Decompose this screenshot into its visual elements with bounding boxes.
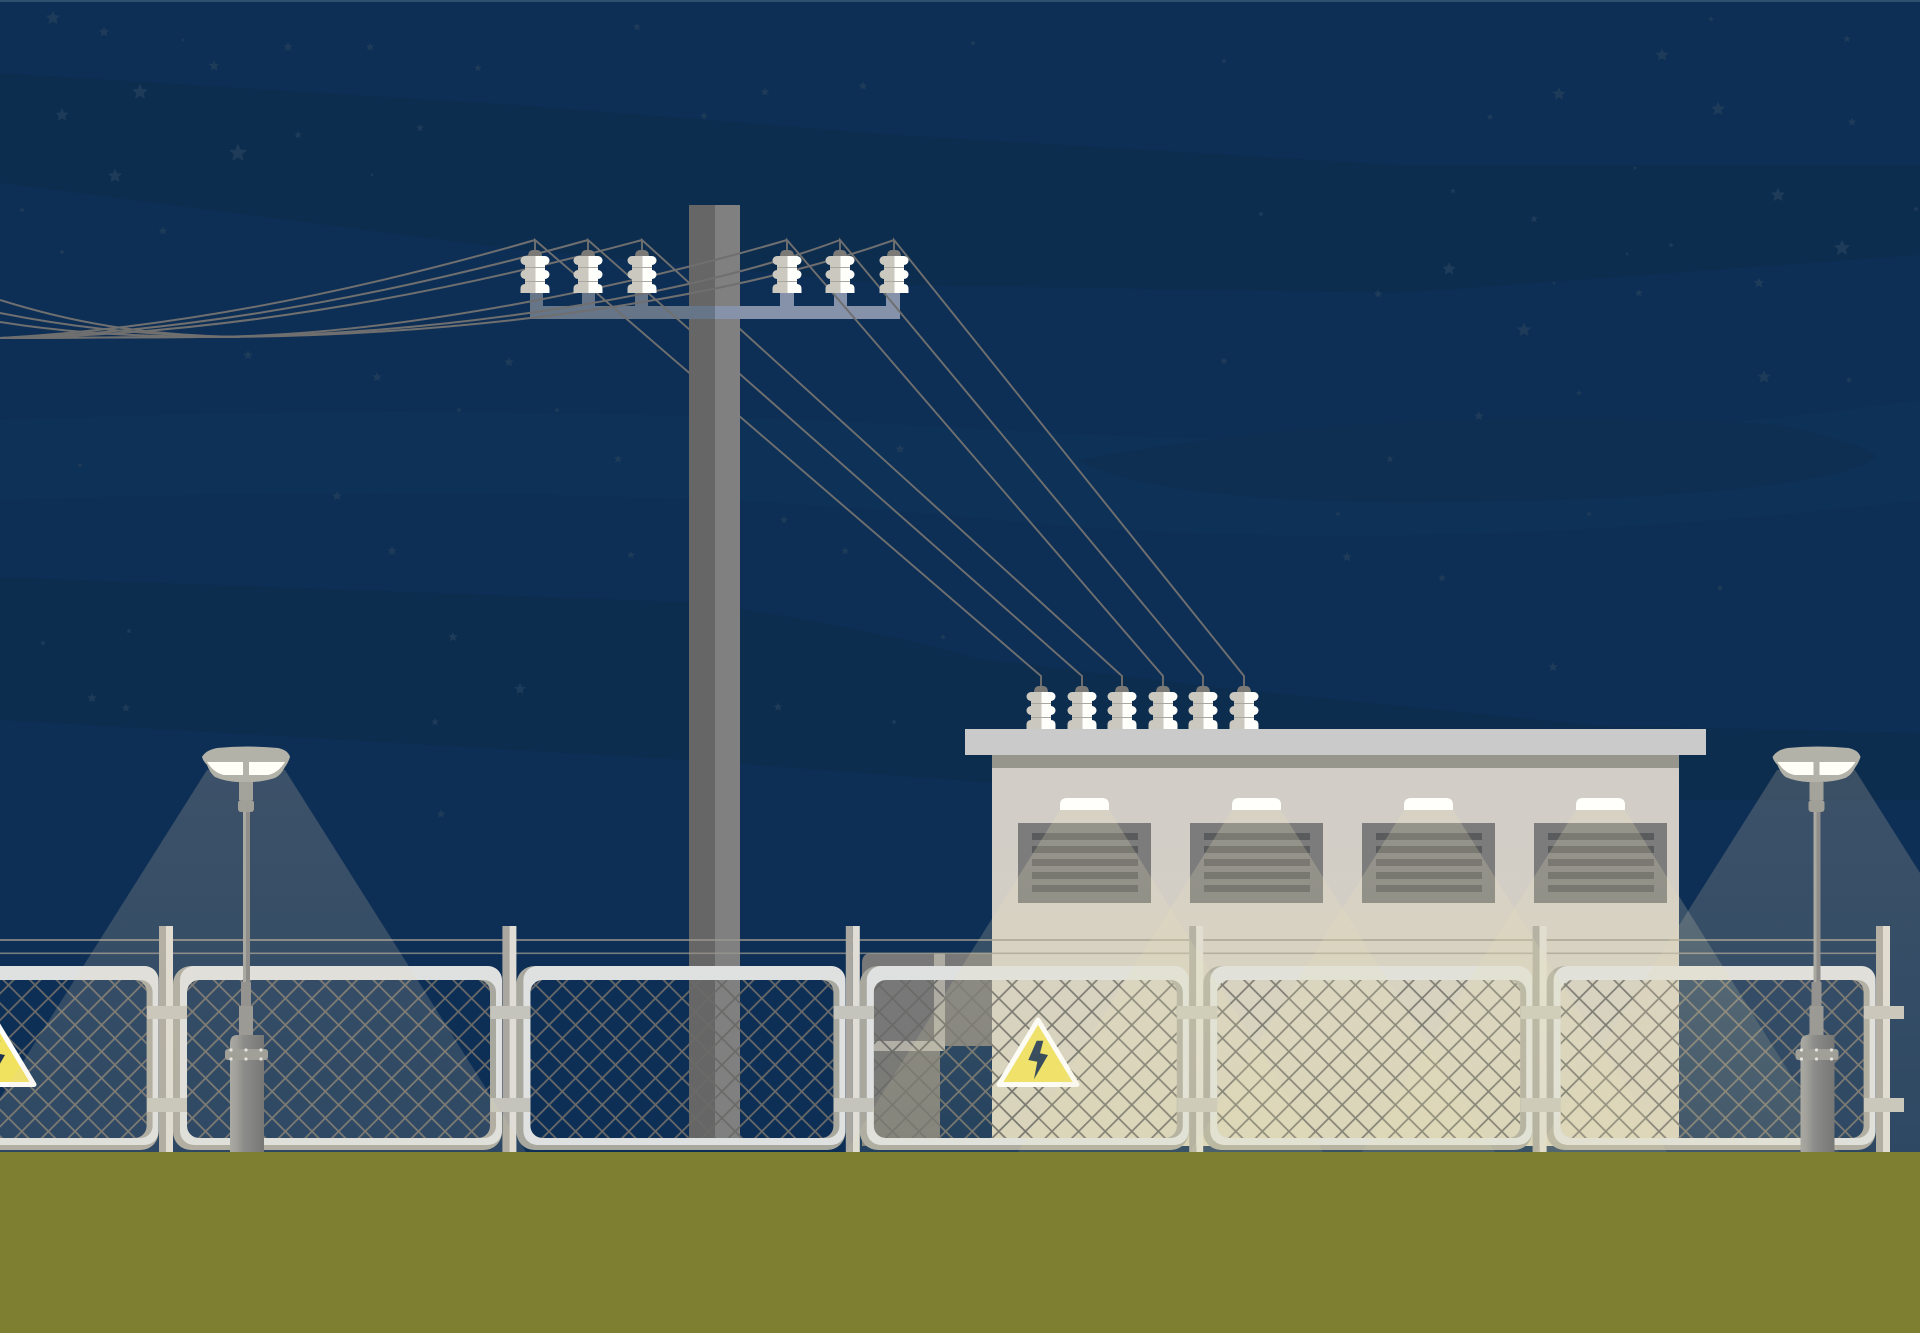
fence post 5 — [1521, 926, 1561, 1152]
fence post 3 — [834, 926, 874, 1152]
fence post 6 — [1864, 926, 1904, 1152]
crossarm insulators — [520, 250, 908, 293]
vent and lamp 3 — [1362, 798, 1495, 903]
building wall — [992, 768, 1679, 1146]
barbed wires along the fence top — [0, 939, 1880, 954]
icon: high voltage warning sign, left edge — [0, 1020, 34, 1084]
fence post 4 — [1177, 926, 1217, 1152]
crossarm — [530, 293, 900, 319]
chain link fence — [0, 926, 1904, 1152]
light cones from building lamps — [846, 810, 1839, 1152]
vent and lamp 4 — [1534, 798, 1667, 903]
fence panel 5 — [1203, 966, 1532, 1150]
utility pole — [689, 205, 740, 1145]
fence panel 3 — [516, 966, 845, 1150]
grass ground — [0, 1152, 1920, 1333]
grey equipment behind the building — [862, 953, 992, 1146]
fence panel 6 — [1547, 966, 1876, 1150]
faint stars — [19, 10, 1919, 818]
icon: high voltage warning sign, centre — [999, 1020, 1077, 1084]
vent and lamp 1 — [1018, 798, 1151, 903]
roof slab — [965, 729, 1706, 755]
light cones from street lamps — [0, 770, 1920, 1152]
power lines running left from the crossarm — [0, 240, 894, 338]
street lamp right — [1772, 746, 1860, 1152]
fence post 1 — [147, 926, 187, 1152]
fence panel 2 — [173, 966, 502, 1150]
roof insulators — [1026, 686, 1258, 729]
transformer building — [965, 729, 1706, 1146]
roof underside shadow — [992, 755, 1679, 768]
power lines running down to the building — [535, 240, 1244, 686]
vent and lamp 2 — [1190, 798, 1323, 903]
fence panel far left — [0, 966, 159, 1150]
fence post 2 — [490, 926, 530, 1152]
fence panel 4 — [860, 966, 1189, 1150]
street lamp left — [202, 746, 290, 1152]
